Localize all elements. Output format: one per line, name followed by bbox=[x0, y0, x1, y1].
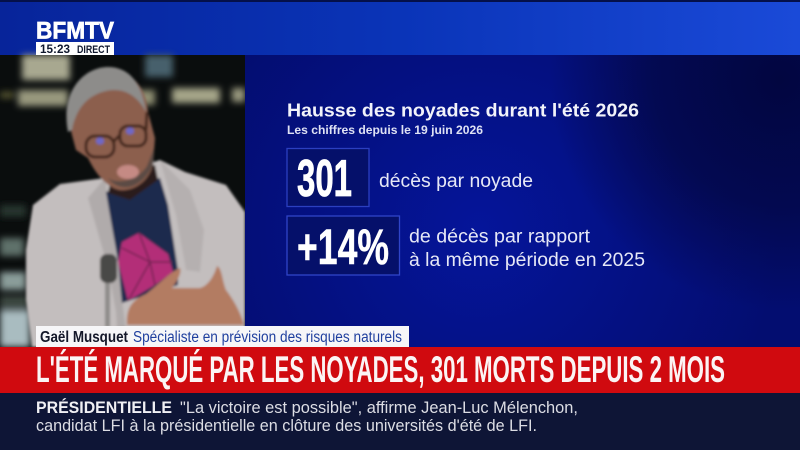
top banner bbox=[0, 0, 800, 55]
time and live label: DIRECT bbox=[77, 44, 110, 56]
neck bbox=[108, 165, 158, 200]
stat: 301 deaths: 301 bbox=[297, 150, 352, 208]
head bbox=[68, 70, 155, 190]
news ticker bbox=[0, 393, 800, 450]
stat: +14% deaths bbox=[287, 216, 645, 275]
name strip bbox=[36, 326, 409, 347]
news ticker: candidat LFI à la présidentielle en clôture des universités d'été de LFI. bbox=[36, 416, 537, 435]
subheading: Les chiffres depuis le 19 juin 2026 bbox=[287, 123, 483, 137]
logo: BFMTV: BFMTV bbox=[36, 18, 114, 44]
panel: statistics background bbox=[245, 55, 800, 347]
hands bbox=[127, 266, 244, 325]
studio background lights bbox=[0, 55, 245, 347]
jacket bbox=[26, 160, 245, 347]
beard bbox=[108, 148, 154, 187]
stat: 301 deaths: décès par noyade bbox=[379, 171, 533, 192]
stat: 301 deaths bbox=[287, 148, 533, 208]
shirt motif bbox=[118, 233, 173, 301]
panel: presenter photo bbox=[0, 55, 245, 347]
shirt bbox=[106, 178, 178, 303]
presenter bbox=[26, 67, 245, 347]
news ticker: PRÉSIDENTIELLE bbox=[36, 398, 172, 417]
microphone bbox=[100, 254, 117, 283]
stat: +14% deaths: à la même période en 2025 bbox=[409, 250, 645, 271]
name strip: Gaël Musquet bbox=[40, 329, 129, 346]
heading: Hausse des noyades durant l'été 2026 bbox=[287, 100, 639, 120]
time and live label bbox=[36, 42, 114, 56]
time and live label: 15:23 bbox=[40, 44, 70, 56]
stat: +14% deaths: de décès par rapport bbox=[409, 226, 591, 248]
glasses bbox=[86, 112, 147, 157]
name strip: Spécialiste en prévision des risques naturels bbox=[133, 329, 402, 346]
news ticker: "La victoire est possible", affirme Jean-Luc Mélenchon, bbox=[180, 398, 578, 417]
hair bbox=[66, 67, 146, 132]
stat: +14% deaths: +14% bbox=[297, 219, 389, 275]
mouth bbox=[117, 165, 139, 179]
